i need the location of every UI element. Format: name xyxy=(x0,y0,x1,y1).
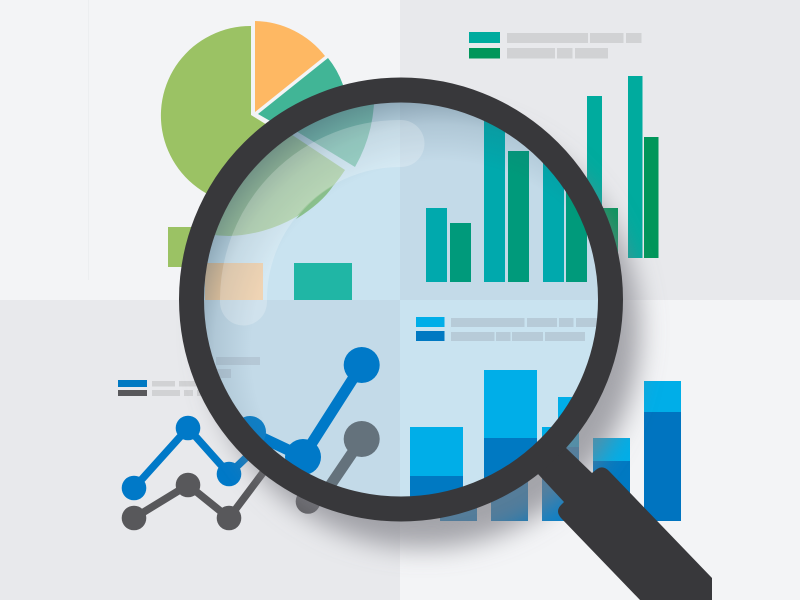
magnified pie: dark green crescent xyxy=(296,186,333,219)
magnified teal legend block xyxy=(294,263,352,300)
pie slice: teal xyxy=(258,58,348,161)
magnifier drop shadow xyxy=(206,114,640,548)
pie chart xyxy=(161,21,348,205)
magnified peach legend block xyxy=(205,263,263,300)
lens glare highlight xyxy=(243,143,401,302)
magnified pie: teal slice xyxy=(298,104,374,167)
green legend block xyxy=(168,227,218,267)
lens contents xyxy=(204,102,598,496)
bar chart: teal and green (unmagnified) xyxy=(587,76,658,266)
line chart: blue series (unmagnified) xyxy=(122,416,252,500)
magnified blue series xyxy=(234,347,380,475)
magnified blue stacked bars xyxy=(410,370,572,496)
lens background quadrants xyxy=(200,100,602,500)
magnifier ring xyxy=(192,90,610,509)
legend: line chart xyxy=(118,380,209,396)
magnified grey series xyxy=(326,421,380,486)
magnified teal and green bars xyxy=(426,110,587,282)
magnified legend: line chart xyxy=(216,357,260,378)
pie slice: orange xyxy=(255,21,325,112)
magnified legend: blue chart xyxy=(416,317,606,341)
lens rim shading xyxy=(204,102,543,418)
bar chart: blue stacked (unmagnified) xyxy=(440,381,681,521)
line chart: grey series (unmagnified) xyxy=(122,466,320,530)
magnifier handle xyxy=(538,447,712,600)
legend: teal and green chart xyxy=(469,32,642,58)
magnified pie: green slice xyxy=(215,135,345,236)
